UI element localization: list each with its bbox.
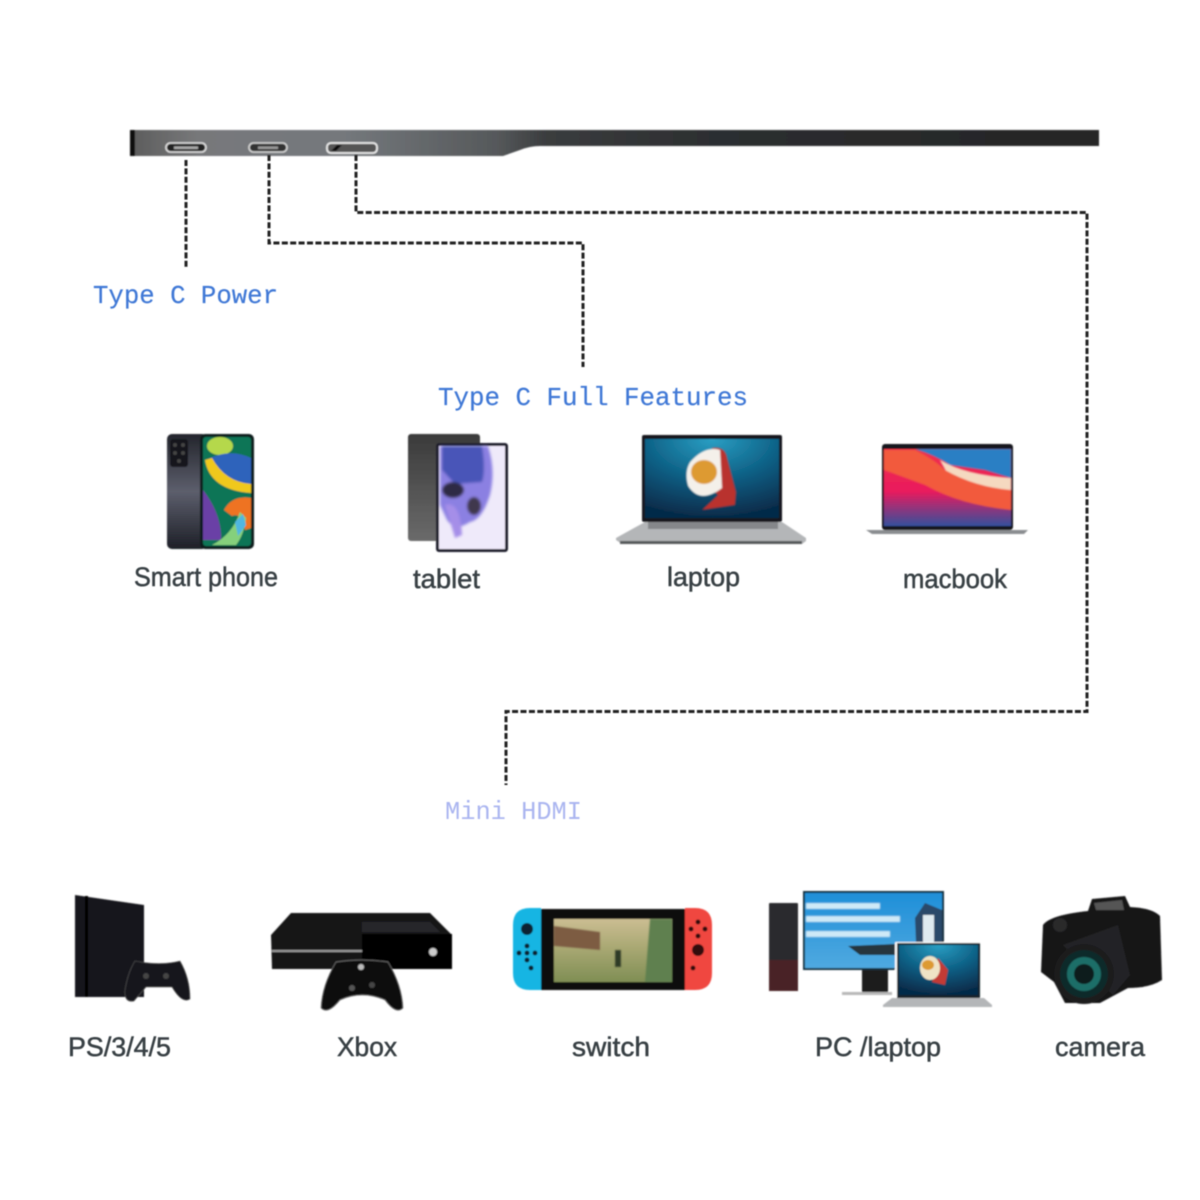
icon: camera: [1041, 896, 1162, 1004]
port: Type C power: [166, 143, 206, 152]
port: Mini HDMI: [327, 143, 377, 153]
label: Smart phone: Smart phone: [134, 562, 278, 592]
label: switch: switch: [572, 1032, 650, 1062]
label: Xbox: Xbox: [337, 1032, 397, 1062]
icon: PC tower, monitor and laptop: [769, 891, 992, 1007]
PC tower: [769, 903, 798, 991]
label: camera: camera: [1055, 1032, 1146, 1062]
icon: smart phone: [167, 434, 254, 549]
label: Type C Full Features: Type C Full Features: [438, 384, 748, 413]
label: macbook: macbook: [903, 564, 1007, 594]
dashed connector: Mini HDMI: [356, 155, 1087, 785]
label: Mini HDMI: Mini HDMI: [445, 798, 582, 827]
label: PC /laptop: PC /laptop: [815, 1032, 941, 1062]
icon: Xbox console and controller: [271, 913, 452, 1010]
icon: Nintendo Switch: [513, 908, 712, 990]
port: Type C full features: [249, 143, 287, 152]
icon: macbook: [866, 444, 1028, 534]
icon: PlayStation console and controller: [75, 895, 190, 1001]
icon: laptop: [616, 435, 806, 544]
label: PS/3/4/5: PS/3/4/5: [68, 1032, 171, 1062]
dashed connector: Type C power: [184, 160, 188, 268]
monitor side profile bar with ports: [130, 130, 1099, 156]
front laptop: [883, 942, 992, 1007]
label: Type C Power: Type C Power: [93, 282, 278, 311]
label: tablet: tablet: [413, 564, 480, 594]
dashed connector: Type C full features: [269, 155, 583, 367]
label: laptop: laptop: [667, 562, 740, 592]
icon: tablet: [408, 434, 508, 552]
monitor: [803, 891, 944, 995]
